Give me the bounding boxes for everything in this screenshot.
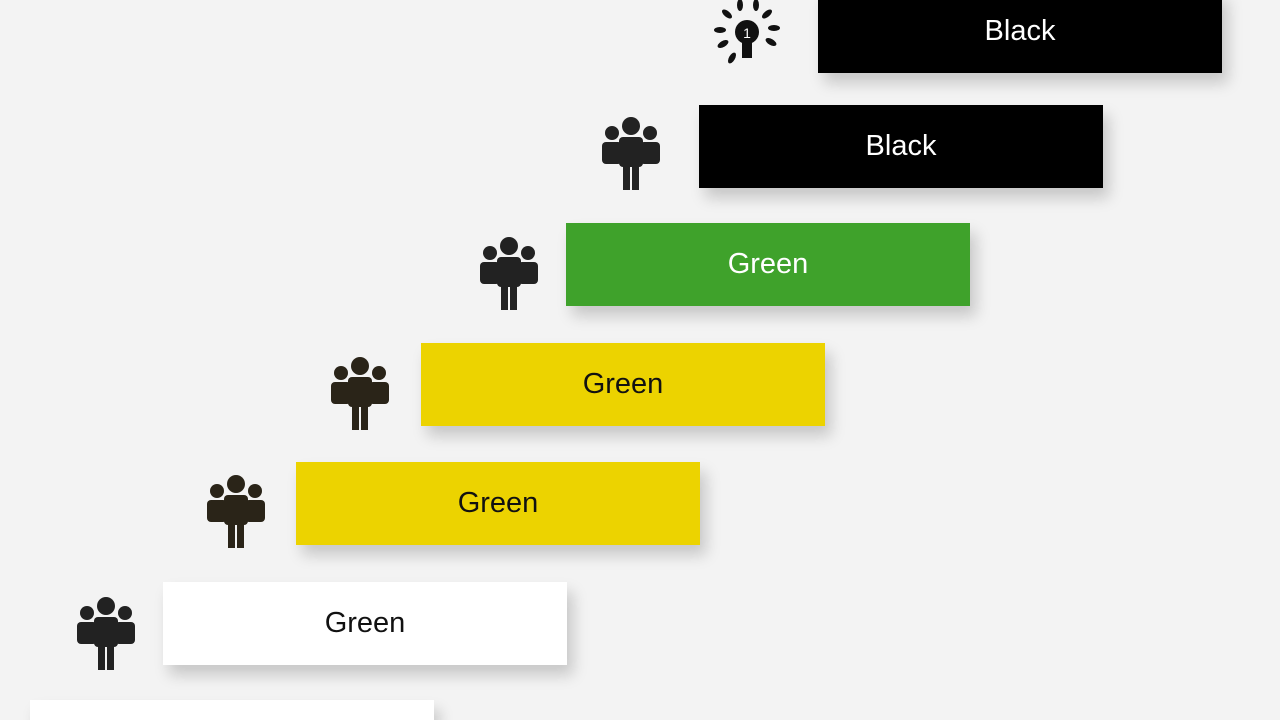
icon: people 5 <box>77 597 135 670</box>
icon: lightbulb <box>714 0 780 64</box>
bar 2: Black <box>699 105 1103 188</box>
bar 1: Black: Black <box>985 15 1055 47</box>
bar 5: yellow Green: Green <box>458 487 538 519</box>
icon: people 2 <box>480 237 538 310</box>
icon: people 1 <box>602 117 660 190</box>
bar 4: yellow Green <box>421 343 825 426</box>
bar 2: Black: Black <box>866 130 936 162</box>
icon: lightbulb: 1 <box>743 25 751 41</box>
bar 5: yellow Green <box>296 462 700 545</box>
icon: people 4 <box>207 475 265 548</box>
bar 3: Green: Green <box>728 248 808 280</box>
bar 4: yellow Green: Green <box>583 368 663 400</box>
bar 3: Green <box>566 223 970 306</box>
bar 1: Black <box>818 0 1222 73</box>
bar 7: white blank <box>30 700 434 720</box>
icon: people 3 <box>331 357 389 430</box>
bar 6: white Green: Green <box>325 607 405 639</box>
bar 6: white Green <box>163 582 567 665</box>
